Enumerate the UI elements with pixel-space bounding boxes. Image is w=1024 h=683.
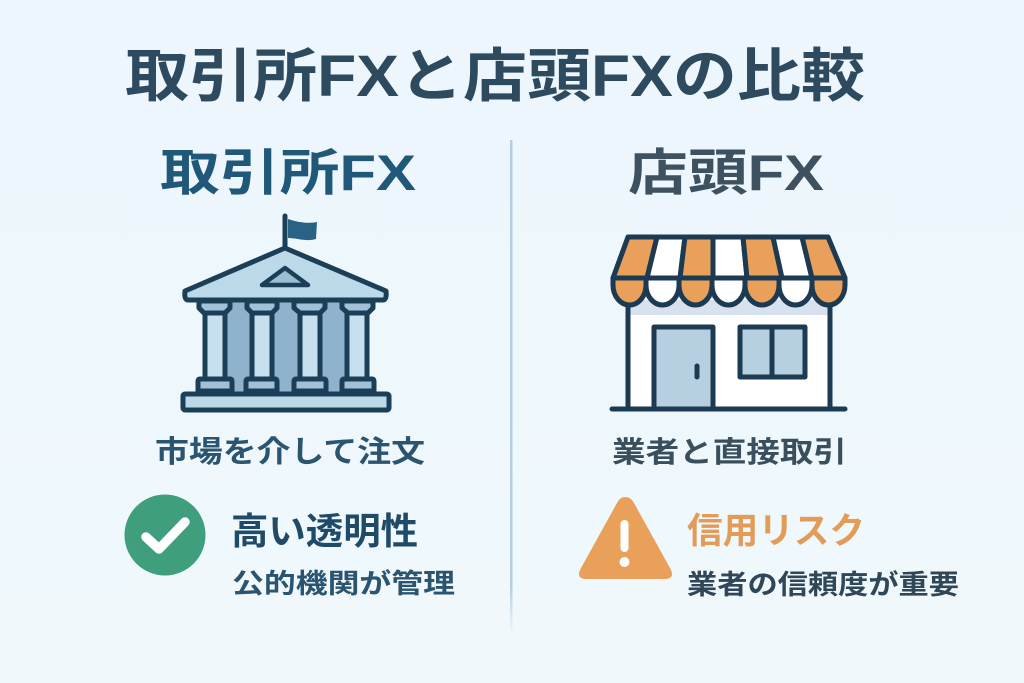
heading: OTC FX: 店頭FX	[628, 145, 824, 201]
feature detail: broker trust: 業者の信頼度が重要	[687, 569, 959, 600]
feature detail: public management: 公的機関が管理	[232, 568, 455, 599]
feature: credit risk: 信用リスク	[687, 510, 865, 551]
panel: exchange FX	[124, 145, 455, 599]
icon: check mark	[124, 494, 206, 576]
panel: OTC FX	[579, 145, 959, 600]
feature: high transparency: 高い透明性	[231, 511, 418, 552]
icon: exchange building	[183, 216, 389, 410]
icon: warning	[579, 497, 672, 579]
caption: direct trade: 業者と直接取引	[612, 436, 847, 469]
caption: via market: 市場を介して注文	[155, 436, 425, 469]
title: 取引所FXと店頭FXの比較	[125, 44, 865, 109]
heading: exchange FX: 取引所FX	[160, 145, 416, 201]
icon: shop	[612, 237, 845, 409]
